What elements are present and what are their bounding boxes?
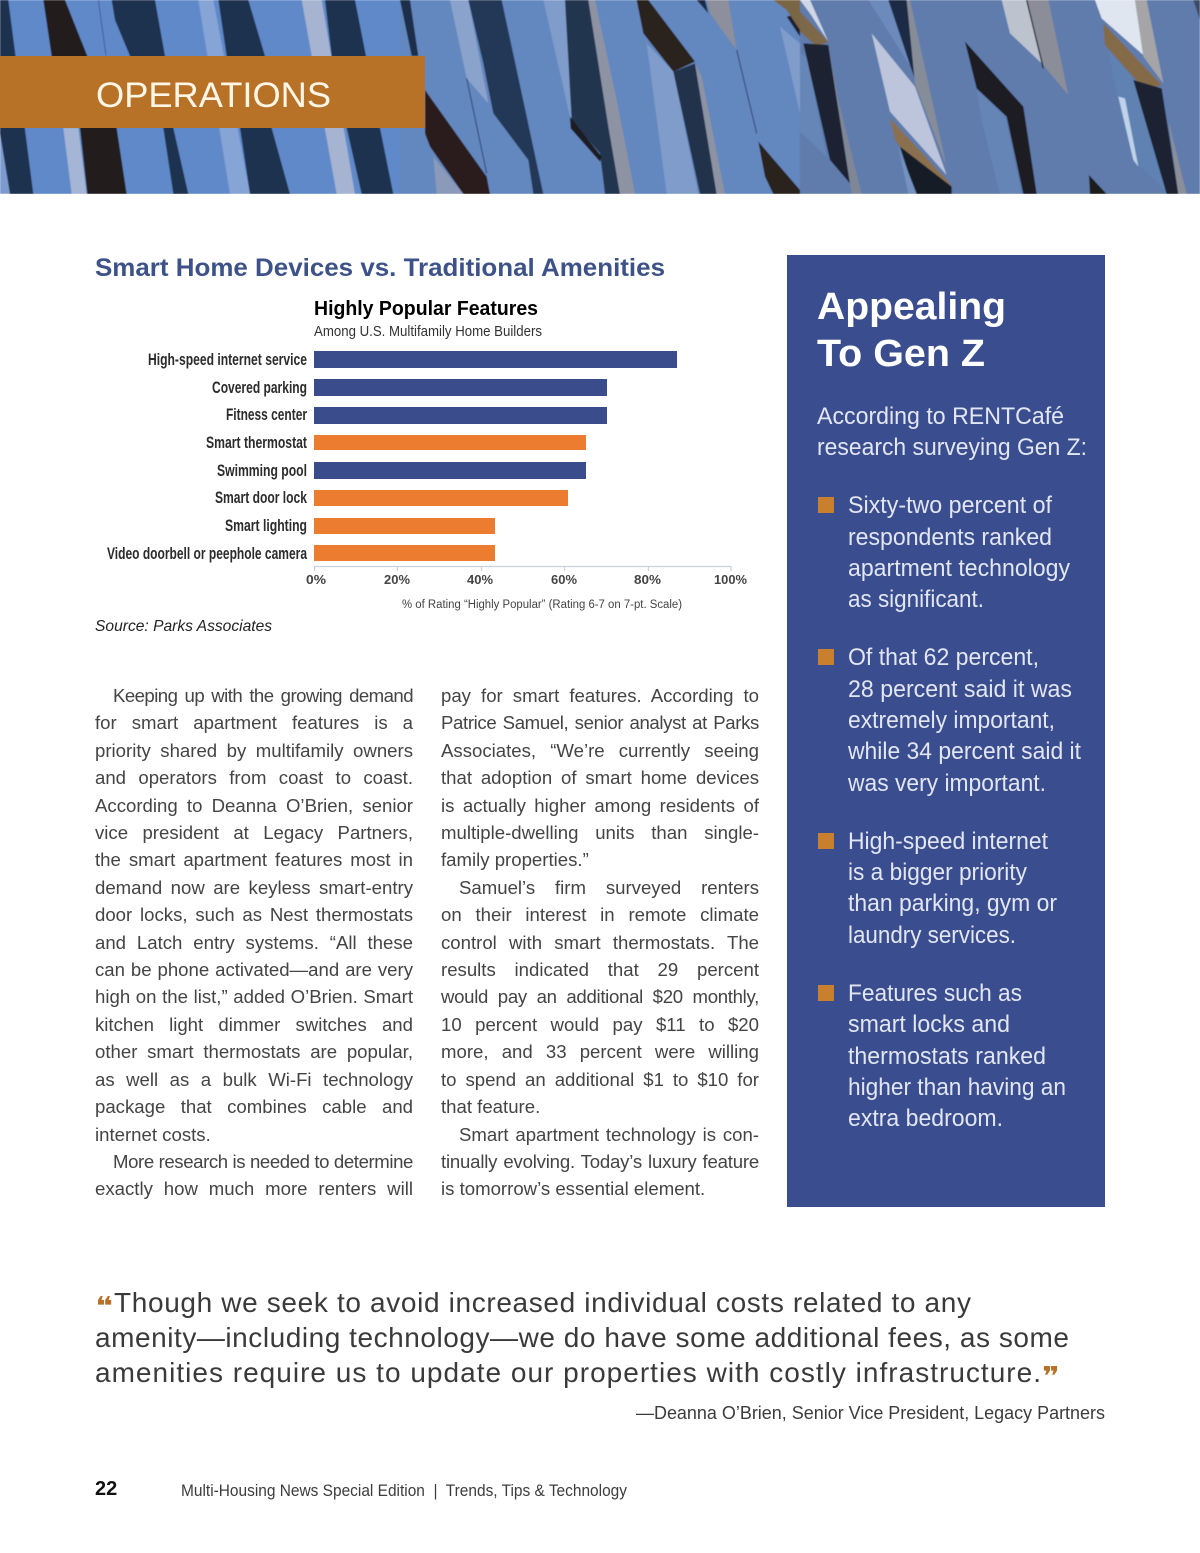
bars: [314, 351, 677, 561]
category labels: Fitness center: [226, 406, 307, 424]
article column 1: and operators from coast to coast.: [95, 767, 413, 788]
bullet 1: respondents ranked: [848, 524, 1052, 551]
bullet 2: Of that 62 percent,: [848, 644, 1039, 671]
category labels: [107, 351, 308, 563]
section banner: OPERATIONS: [0, 56, 425, 128]
article column 2: that adoption of smart home devices: [441, 767, 759, 788]
sidebar panel: Appealing to Gen Z: [787, 255, 1105, 1207]
bullet 2: 28 percent said it was: [848, 676, 1072, 703]
sidebar heading: Appealing: [817, 286, 1006, 328]
pull quote: [95, 1287, 1069, 1392]
x axis: [306, 566, 747, 587]
bullet 3: is a bigger priority: [848, 859, 1027, 886]
sidebar intro: According to RENTCafé: [817, 403, 1064, 430]
closing quote mark: ❞: [1042, 1362, 1060, 1392]
article column 2: is actually higher among residents of: [441, 795, 759, 816]
article column 1: kitchen light dimmer switches and: [95, 1014, 413, 1035]
bullet 2: [818, 644, 1081, 797]
article column 1: priority shared by multifamily owners: [95, 740, 413, 761]
article column 1: high on the list,” added O’Brien. Smart: [95, 986, 413, 1007]
category labels: Covered parking: [212, 379, 307, 397]
bullet 2: while 34 percent said it: [847, 738, 1081, 765]
category labels: High-speed internet service: [148, 351, 307, 369]
bullet 4: thermostats ranked: [848, 1043, 1046, 1070]
bullet 1: apartment technology: [848, 555, 1070, 582]
bullet 3: laundry services.: [848, 922, 1016, 949]
article column 2: that feature.: [441, 1096, 540, 1117]
article column 1: [95, 685, 413, 1199]
bullet 4: extra bedroom.: [848, 1105, 1003, 1132]
bullet 1: [818, 492, 1070, 613]
bullet 2: was very important.: [847, 770, 1046, 797]
article column 1: demand now are keyless smart-entry: [95, 877, 413, 898]
article column 2: 10 percent would pay $11 to $20: [441, 1014, 759, 1035]
article column 1: internet costs.: [95, 1124, 211, 1144]
opening quote mark: ❝: [95, 1292, 113, 1322]
article column 2: multiple-dwelling units than single-: [441, 822, 759, 843]
sidebar intro: [817, 403, 1087, 461]
article column 1: More research is needed to determine: [113, 1151, 413, 1172]
quote text: amenity—including technology—we do have some additional fees, as some: [95, 1322, 1069, 1353]
article column 2: control with smart thermostats. The: [441, 932, 759, 953]
x axis: 0%: [306, 573, 326, 587]
article column 1: vice president at Legacy Partners,: [95, 822, 413, 843]
category labels: Video doorbell or peephole camera: [107, 545, 308, 563]
header photo: building facade: [0, 0, 1200, 194]
x axis: 20%: [384, 573, 410, 587]
axis title: % of Rating “Highly Popular” (Rating 6-7 on 7-pt. Scale): [402, 599, 682, 611]
category labels: Swimming pool: [217, 462, 307, 480]
quote text: [95, 1287, 1069, 1388]
article column 2: is tomorrow’s essential element.: [441, 1178, 705, 1199]
article column 1: door locks, such as Nest thermostats: [95, 904, 413, 925]
chart subtitle: Among U.S. Multifamily Home Builders: [314, 324, 542, 340]
article column 2: to spend an additional $1 to $10 for: [441, 1069, 759, 1090]
category labels: Smart thermostat: [206, 434, 307, 452]
article column 2: on their interest in remote climate: [441, 904, 759, 925]
x axis: 80%: [634, 573, 661, 587]
article column 1: other smart thermostats are popular,: [95, 1041, 413, 1062]
chart source: Source: Parks Associates: [95, 618, 272, 635]
article column 2: would pay an additional $20 monthly,: [441, 986, 759, 1007]
article column 2: family properties.”: [441, 849, 589, 870]
quote text: Though we seek to avoid increased individual costs related to any: [114, 1287, 971, 1318]
x axis: 60%: [551, 573, 577, 587]
article column 2: Associates, “We’re currently seeing: [441, 740, 759, 761]
bullet 3: [818, 828, 1057, 949]
article column 1: as well as a bulk Wi-Fi technology: [95, 1069, 413, 1090]
x axis: 100%: [714, 573, 747, 587]
sidebar intro: research surveying Gen Z:: [817, 434, 1087, 461]
quote text: amenities require us to update our properties with costly infrastructure.: [95, 1357, 1041, 1388]
bullet 1: Sixty-two percent of: [848, 492, 1052, 519]
footer text: Multi-Housing News Special Edition | Trends, Tips & Technology: [181, 1482, 628, 1500]
bullet 3: than parking, gym or: [848, 890, 1057, 917]
article column 2: more, and 33 percent were willing: [441, 1041, 759, 1062]
bullet 1: as significant.: [848, 586, 984, 613]
quote attribution: —Deanna O’Brien, Senior Vice President, Legacy Partners: [636, 1402, 1105, 1423]
bullet 3: High-speed internet: [848, 828, 1048, 855]
x axis: 40%: [467, 573, 493, 587]
article column 1: the smart apartment features most in: [95, 849, 413, 870]
bullet 4: smart locks and: [848, 1011, 1010, 1038]
article column 2: Samuel’s firm surveyed renters: [459, 877, 759, 898]
article column 1: Keeping up with the growing demand: [113, 685, 413, 706]
bullet 2: extremely important,: [848, 707, 1055, 734]
bullet 4: Features such as: [848, 980, 1022, 1007]
article column 1: can be phone activated—and are very: [95, 959, 413, 980]
bullet 4: higher than having an: [848, 1074, 1066, 1101]
article column 2: results indicated that 29 percent: [441, 959, 759, 980]
article column 1: According to Deanna O’Brien, senior: [95, 795, 413, 816]
bar chart: highly popular features: [107, 298, 747, 611]
article column 1: package that combines cable and: [95, 1096, 413, 1117]
article column 1: exactly how much more renters will: [95, 1178, 413, 1199]
article column 1: and Latch entry systems. “All these: [95, 932, 413, 953]
article column 2: Smart apartment technology is con-: [459, 1124, 759, 1144]
article column 2: tinually evolving. Today’s luxury feature: [441, 1151, 759, 1172]
article column 2: Patrice Samuel, senior analyst at Parks: [441, 712, 759, 733]
category labels: Smart lighting: [225, 517, 307, 535]
category labels: Smart door lock: [215, 489, 308, 507]
sidebar heading: To Gen Z: [817, 333, 985, 375]
section banner: OPERATIONS: OPERATIONS: [96, 76, 331, 115]
article column 2: [441, 685, 760, 1199]
article column 2: pay for smart features. According to: [441, 685, 759, 706]
article column 1: for smart apartment features is a: [95, 712, 413, 733]
sidebar heading: [817, 286, 1006, 375]
chart heading: Smart Home Devices vs. Traditional Amenities: [95, 254, 665, 282]
chart title: Highly Popular Features: [314, 298, 538, 320]
bullet 4: [818, 980, 1066, 1132]
page number: 22: [95, 1478, 117, 1500]
